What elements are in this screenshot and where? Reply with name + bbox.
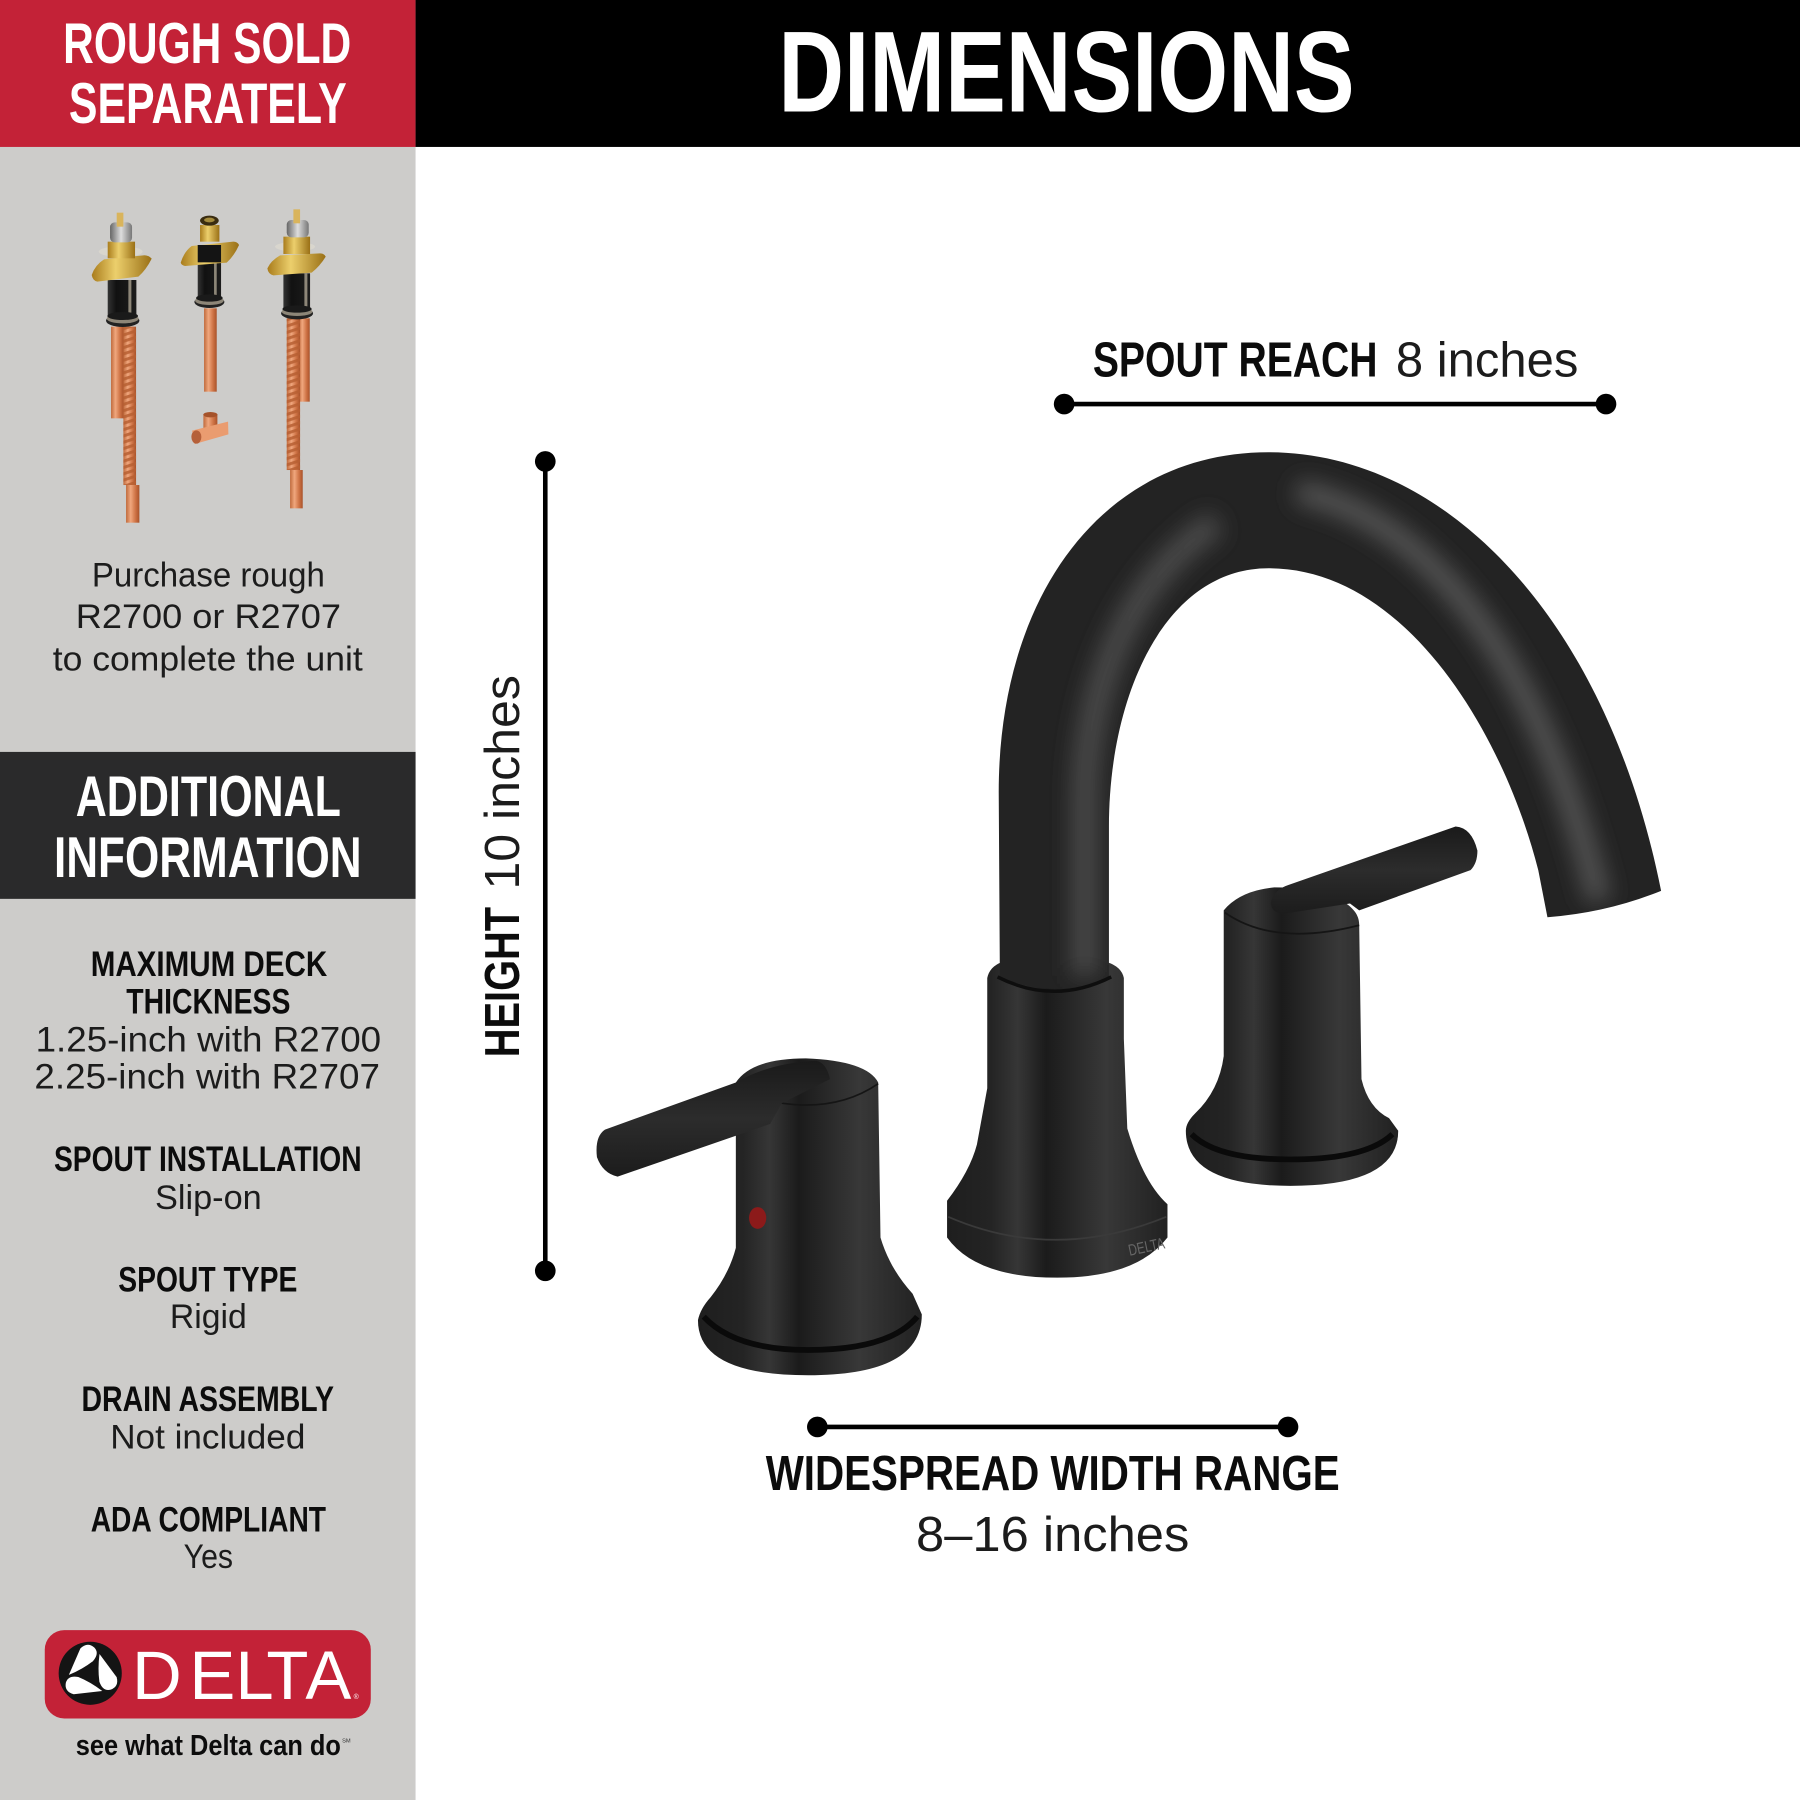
spec: maximum deck thickness: THICKNESS bbox=[126, 982, 290, 1022]
valve one bbox=[92, 213, 152, 523]
banner: additional information: ADDITIONAL bbox=[76, 765, 341, 829]
logo: delta: ® bbox=[354, 1693, 359, 1701]
dimension: widespread width range bbox=[766, 1417, 1340, 1562]
banner: rough sold separately: SEPARATELY bbox=[69, 72, 347, 136]
dimension: height bbox=[475, 451, 556, 1281]
dimension: spout reach: 8 inches bbox=[1396, 333, 1578, 388]
right handle bbox=[1186, 827, 1477, 1186]
spec: ada compliant: ADA COMPLIANT bbox=[91, 1499, 326, 1539]
title banner: dimensions: DIMENSIONS bbox=[778, 8, 1355, 136]
dimension: height: 10 inches bbox=[475, 675, 530, 890]
spec: ada compliant bbox=[91, 1499, 326, 1576]
dimension: spout reach: SPOUT REACH bbox=[1093, 333, 1378, 388]
banner: additional information bbox=[0, 752, 416, 899]
logo: delta: DELTA bbox=[132, 1637, 351, 1714]
dimension: height: HEIGHT bbox=[475, 907, 530, 1057]
spec: spout installation: Slip-on bbox=[155, 1179, 262, 1217]
spec: spout installation bbox=[54, 1139, 362, 1217]
spec: spout type: Rigid bbox=[170, 1298, 247, 1336]
logo: delta bbox=[45, 1630, 371, 1718]
banner: additional information: INFORMATION bbox=[54, 826, 362, 890]
banner: rough sold separately bbox=[0, 0, 416, 147]
text: purchase rough note bbox=[53, 557, 363, 678]
spec: maximum deck thickness: 1.25-inch with R2700 bbox=[36, 1020, 381, 1060]
image: rough-in valves bbox=[92, 209, 326, 523]
tagline: SM bbox=[342, 1739, 351, 1745]
spec: maximum deck thickness bbox=[34, 944, 381, 1096]
spec: drain assembly: DRAIN ASSEMBLY bbox=[82, 1379, 334, 1419]
faucet spout bbox=[998, 452, 1661, 991]
icon: hot indicator bbox=[749, 1207, 766, 1229]
spec: spout installation: SPOUT INSTALLATION bbox=[54, 1139, 362, 1179]
text: purchase rough note: R2700 or R2707 bbox=[76, 598, 341, 636]
spec: drain assembly bbox=[82, 1379, 334, 1457]
text: purchase rough note: Purchase rough bbox=[92, 557, 325, 595]
spec: drain assembly: Not included bbox=[110, 1419, 305, 1457]
dimension: widespread width range: WIDESPREAD WIDTH RANGE bbox=[766, 1446, 1340, 1501]
image: black faucet bbox=[597, 452, 1661, 1375]
left handle bbox=[597, 1058, 922, 1375]
spec: spout type bbox=[118, 1259, 297, 1336]
dimension: widespread width range: 8–16 inches bbox=[916, 1507, 1189, 1562]
faucet spout base bbox=[947, 962, 1167, 1278]
text: purchase rough note: to complete the unit bbox=[53, 640, 363, 678]
valve two bbox=[181, 216, 239, 392]
faucet spout base: DELTA bbox=[1127, 1234, 1167, 1260]
panel: left sidebar bbox=[0, 0, 416, 1800]
valve three bbox=[267, 209, 326, 508]
copper tee fitting bbox=[191, 412, 228, 444]
icon: delta emblem bbox=[59, 1642, 126, 1706]
banner: rough sold separately: ROUGH SOLD bbox=[63, 12, 351, 76]
dimension: spout reach bbox=[1054, 333, 1616, 414]
spec: spout type: SPOUT TYPE bbox=[118, 1259, 297, 1299]
spec: maximum deck thickness: MAXIMUM DECK bbox=[91, 944, 327, 984]
spec: maximum deck thickness: 2.25-inch with R2707 bbox=[34, 1056, 380, 1096]
tagline: see what Delta can do bbox=[76, 1730, 341, 1762]
spec: ada compliant: Yes bbox=[184, 1538, 233, 1576]
title banner: dimensions bbox=[416, 0, 1800, 147]
